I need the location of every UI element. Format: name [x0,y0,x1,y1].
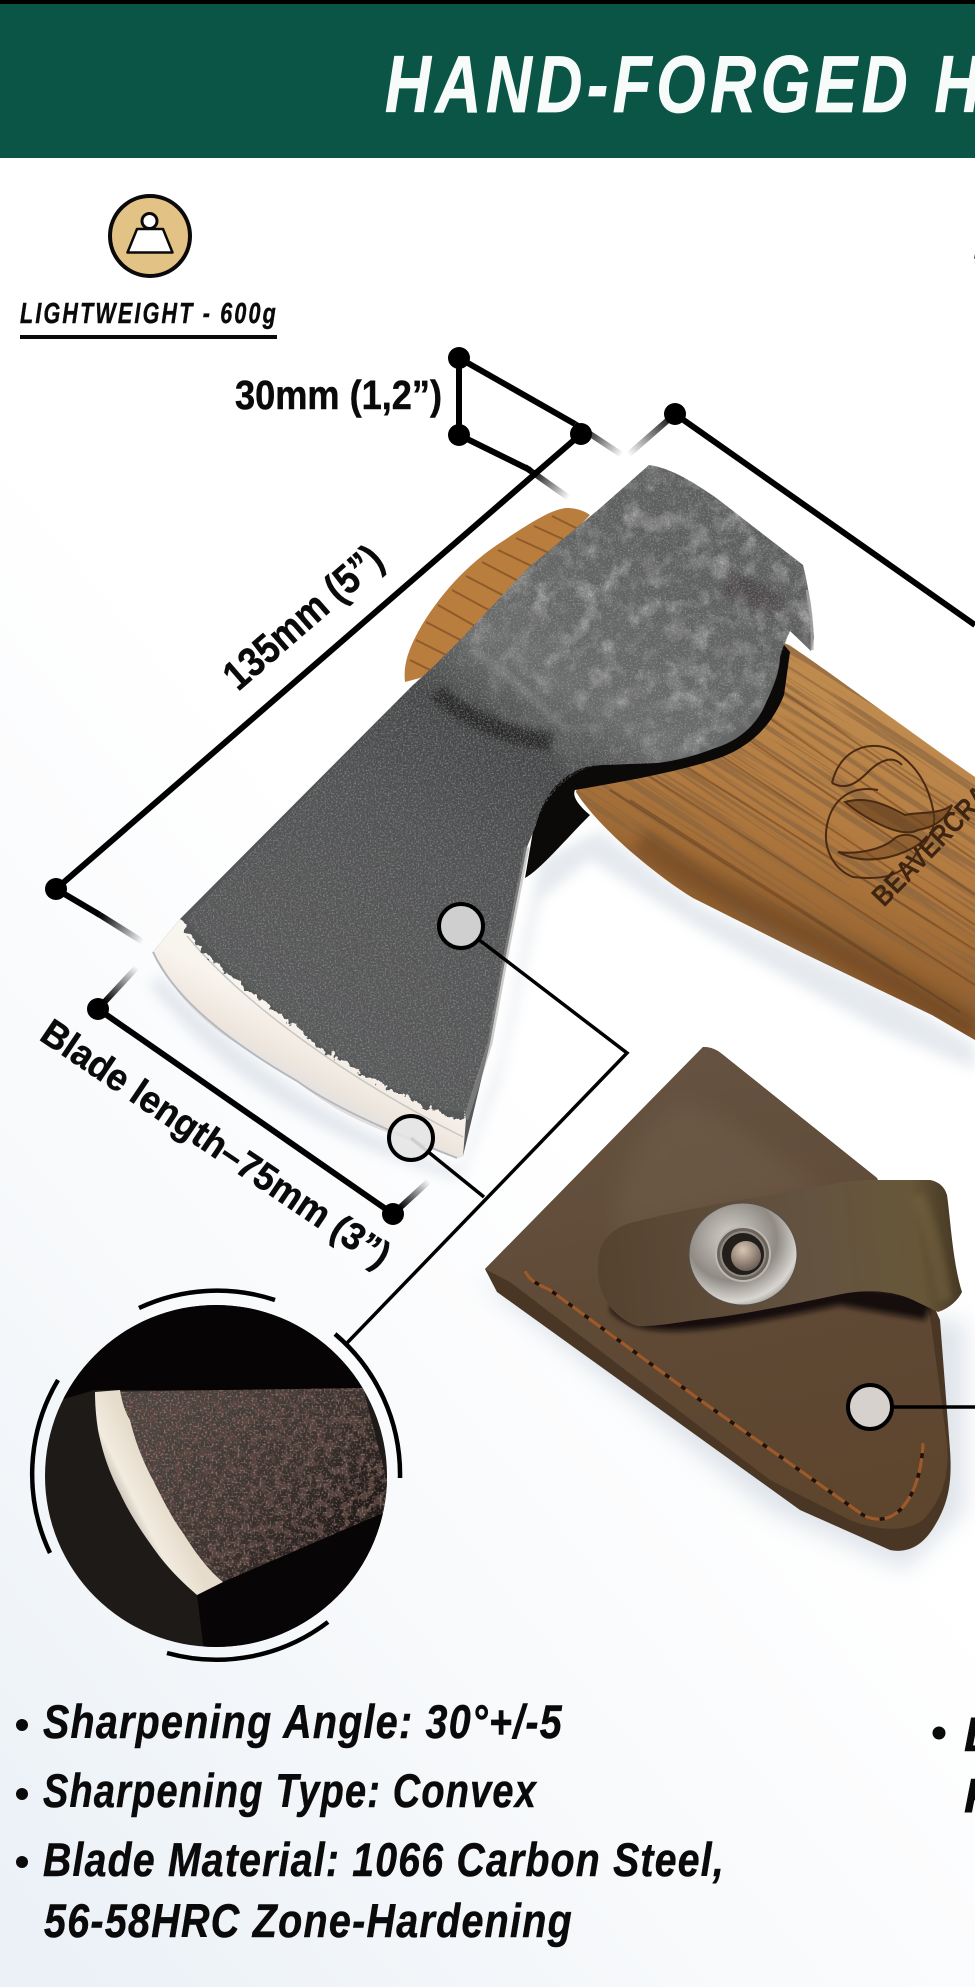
spec list: blade: Blade Material: 1066 Carbon Steel, [43,1833,725,1886]
spec list: blade: Sharpening Angle: 30°+/-5 [43,1695,563,1748]
label: head length: 135mm (5”) [214,535,392,699]
poll mottling [450,465,814,777]
callout connectors [347,926,975,1407]
hamon line [182,850,475,1120]
detail lower dark [197,1513,383,1647]
detail top dark [63,1305,364,1400]
axe head [153,465,814,1158]
neck dark band [437,692,552,742]
snap button [689,1203,797,1305]
header band [0,0,975,158]
detail white edge [95,1390,223,1595]
marker: blade body [439,904,483,948]
axe handle [153,465,975,1267]
label: head width: 30mm (1,2”) [235,372,442,418]
sheath body [485,1047,951,1551]
strap [598,1180,962,1326]
spec list: sheath (cropped) [932,1709,975,1823]
weight badge [20,196,278,339]
spec list: blade [16,1695,725,1947]
handle logo [826,746,975,913]
blade grain [186,465,814,1112]
spec list: blade: Sharpening Type: Convex [43,1764,537,1817]
marker: sheath [848,1385,892,1429]
spec list: blade: 56-58HRC Zone-Hardening [44,1894,573,1947]
weight label: LIGHTWEIGHT - 600g [20,298,278,330]
sheath stitching [525,1271,923,1519]
handle end grain [405,508,590,682]
icon: weight [110,196,190,276]
detail blade [120,1388,387,1595]
label: blade length: Blade length–75mm (3”) [33,1012,398,1277]
axe shadow [150,830,975,1180]
strap shadow [610,1280,935,1331]
dimension lines [45,347,975,1225]
detail circle [45,1305,387,1647]
marker: blade edge [389,1116,433,1160]
detail ring arcs [32,1291,400,1660]
sheath shadow [480,1280,965,1570]
blade edge [153,919,466,1158]
sheath photo [480,1047,965,1570]
eye shadow [525,640,790,878]
